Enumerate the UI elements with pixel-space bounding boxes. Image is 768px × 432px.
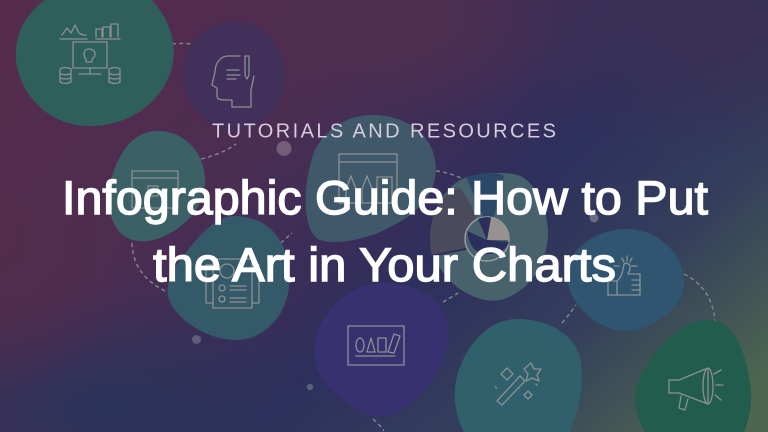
icon: head (212, 56, 254, 107)
blob: thumbs up (567, 229, 684, 331)
icon: browser window (132, 171, 178, 208)
blob: megaphone (635, 320, 751, 432)
icon: megaphone (669, 368, 723, 410)
blob: window with image (108, 131, 205, 241)
title: Infographic Guide: How to Put (62, 171, 708, 224)
blob: magic wand (455, 319, 582, 432)
blob: analytics dashboard (16, 0, 174, 126)
icon: pie chart (465, 217, 509, 261)
decorative dots (192, 141, 598, 390)
title: the Art in Your Charts (153, 238, 616, 291)
dashed connector paths (132, 44, 715, 431)
icon: wand and stars (496, 363, 541, 405)
icon: monitor with bulb and data (60, 24, 120, 84)
icon: window with pen nibs (339, 154, 397, 203)
blob: head with pencil (183, 22, 285, 130)
blob: pie chart split (430, 173, 548, 301)
subtitle: TUTORIALS AND RESOURCES (212, 120, 556, 142)
blob: large window with pens (306, 115, 436, 242)
icon: thumbs up (608, 256, 640, 295)
icon: shapes and marker (348, 326, 404, 365)
title (62, 171, 708, 291)
blob: report document (168, 216, 289, 340)
icon: document with pie charts (206, 259, 259, 308)
blob: indigo sketch (314, 283, 448, 416)
